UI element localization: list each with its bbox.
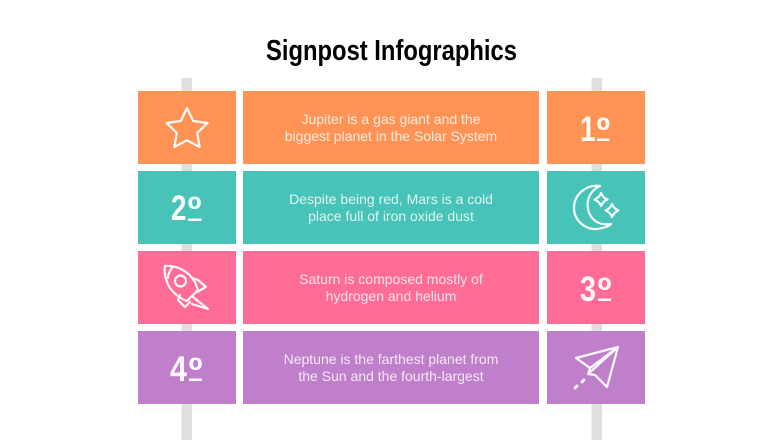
Saturn text panel: hydrogen and helium: [326, 288, 456, 304]
number 1 panel: º: [596, 110, 610, 151]
Jupiter text panel: biggest planet in the Solar System: [285, 128, 497, 144]
number 3 panel: 3: [580, 270, 596, 309]
number 4 panel: [138, 331, 236, 404]
row 3: Saturn: [138, 251, 645, 324]
number 1 panel: 1: [580, 110, 596, 149]
Saturn text panel: Saturn is composed mostly of: [299, 271, 483, 287]
rocket icon panel: [138, 251, 236, 324]
Neptune text panel: Neptune is the farthest planet from: [284, 351, 498, 367]
Saturn text panel: [243, 251, 539, 324]
number 4 panel: 4: [170, 350, 187, 389]
Neptune text panel: [243, 331, 539, 404]
number 3 panel: º: [598, 270, 612, 311]
Neptune text panel: the Sun and the fourth-largest: [298, 368, 484, 384]
Mars text panel: place full of iron oxide dust: [308, 208, 474, 224]
paper plane icon panel: [547, 331, 645, 404]
Mars text panel: [243, 171, 539, 244]
number 2 panel: 2: [171, 189, 186, 228]
right signpost pole: [592, 78, 602, 440]
number 2 panel: [138, 171, 236, 244]
left signpost pole: [182, 78, 192, 440]
number 2 panel: º: [188, 189, 202, 230]
Jupiter text panel: Jupiter is a gas giant and the: [301, 111, 481, 127]
star icon panel: [138, 91, 236, 164]
number 3 panel: [547, 251, 645, 324]
number 4 panel: º: [188, 350, 202, 391]
number 1 panel: [547, 91, 645, 164]
row 1: Jupiter: [138, 91, 645, 164]
Jupiter text panel: [243, 91, 539, 164]
Mars text panel: Despite being red, Mars is a cold: [289, 191, 493, 207]
row 4: Neptune: [138, 331, 645, 404]
row 2: Mars: [138, 171, 645, 244]
moon icon panel: [547, 171, 645, 244]
title: Signpost Infographics: [266, 35, 517, 67]
